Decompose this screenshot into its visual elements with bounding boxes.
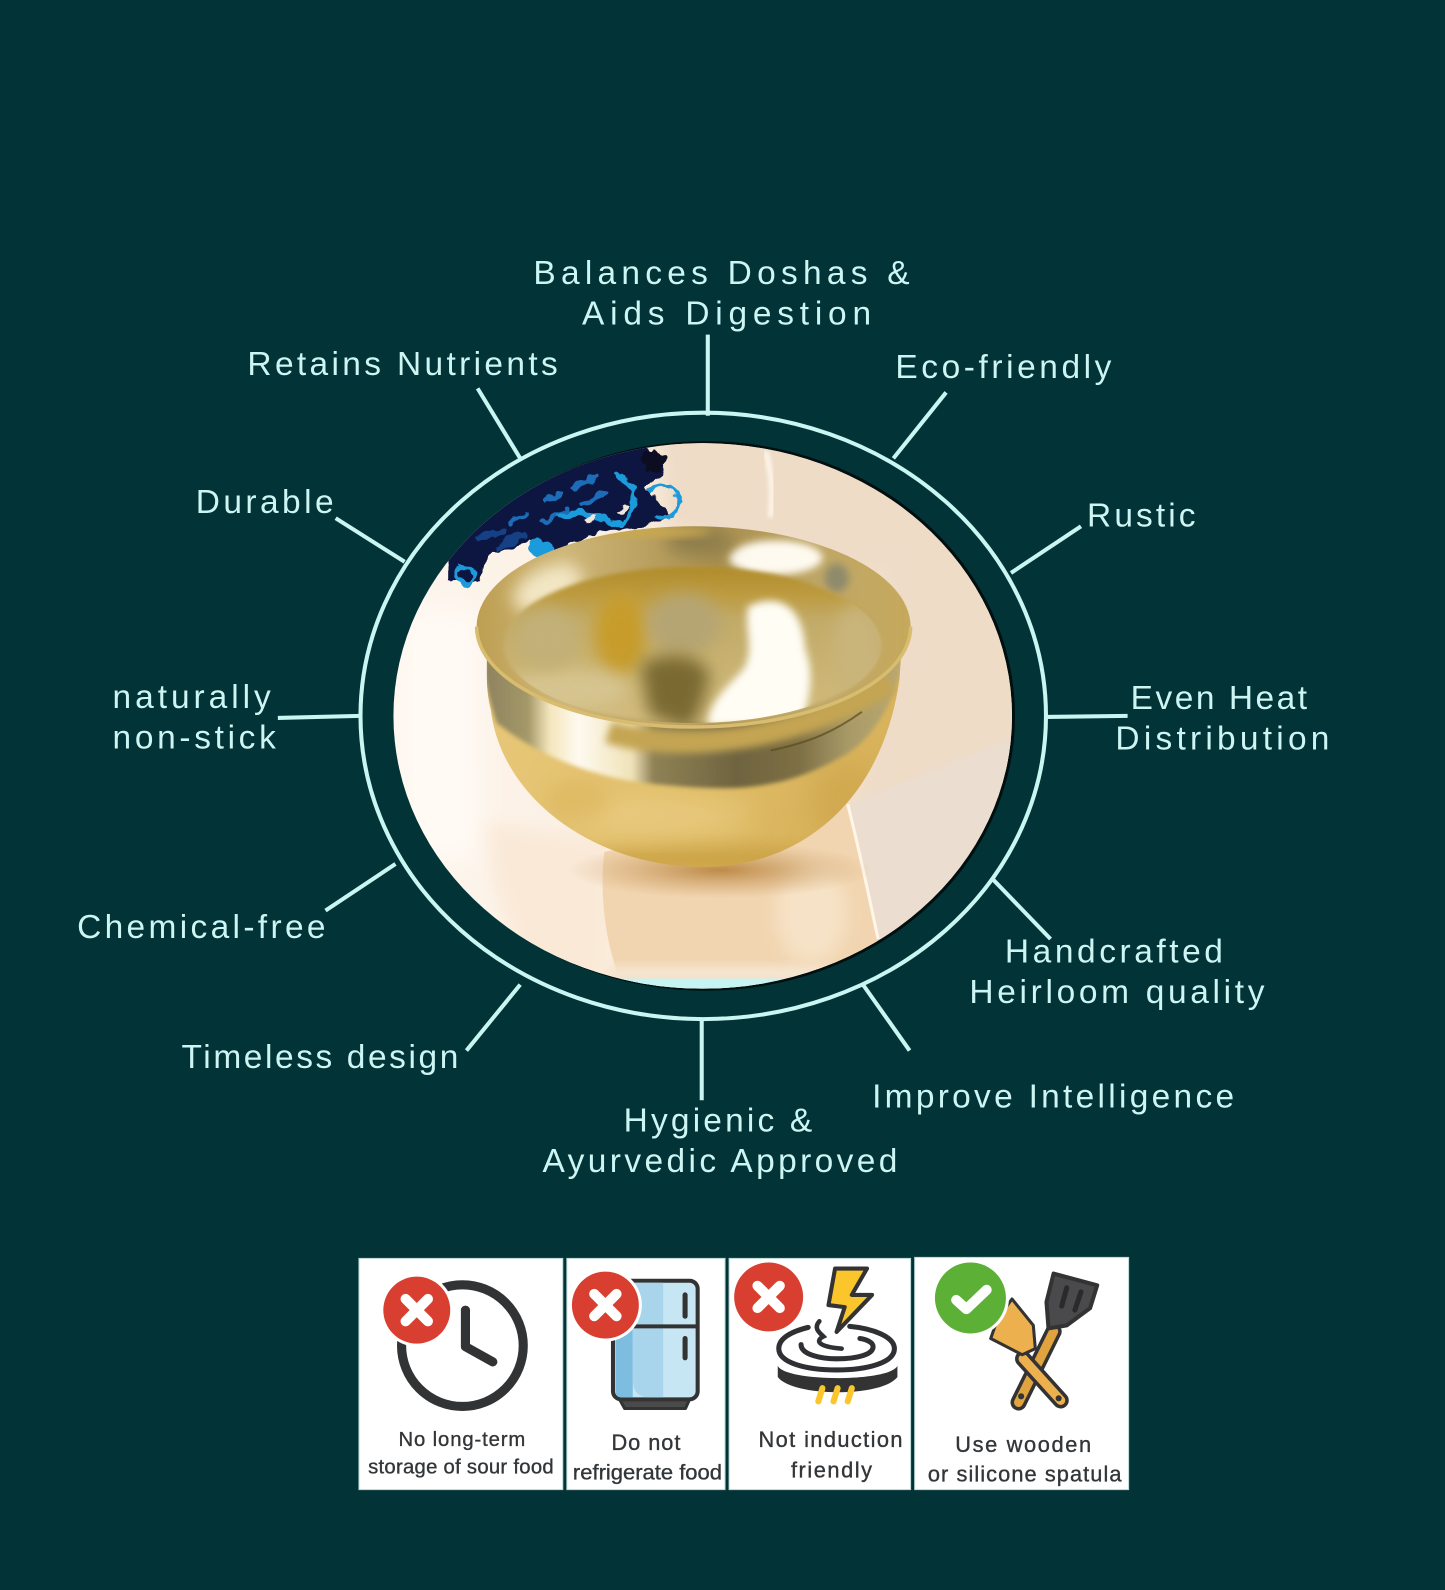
card: use wooden or silicone spatula: [915, 1257, 1129, 1490]
caption: No long-term: [399, 1429, 525, 1451]
icon: wooden fork spatula: [991, 1299, 1062, 1401]
caption: [928, 1432, 1122, 1486]
caption: friendly: [791, 1457, 872, 1482]
label: naturally non-stick: [113, 679, 276, 756]
label: Even Heat Distribution: Even Heat: [1131, 680, 1308, 717]
spoke lines: [278, 335, 1128, 1100]
icon: red cross badge: [734, 1262, 803, 1331]
label: Balances Doshas & Aids Digestion: Balances Doshas &: [533, 255, 910, 292]
icon: clock: [402, 1285, 523, 1406]
bowl rim: [477, 526, 911, 727]
card: no long-term storage of sour food: [359, 1258, 563, 1490]
label: Improve Intelligence: Improve Intelligence: [872, 1078, 1234, 1115]
label: Hygienic & Ayurvedic Approved: [543, 1103, 897, 1180]
photo shadow: [396, 441, 1015, 991]
icon: induction coil and lightning: [778, 1269, 897, 1401]
label: naturally non-stick: naturally: [113, 679, 271, 716]
cyan sliver at photo base: [620, 978, 786, 989]
icon: silicone spatula: [1019, 1274, 1097, 1402]
caption: Do not: [611, 1430, 680, 1455]
caption: [573, 1430, 722, 1484]
label: Handcrafted Heirloom quality: [969, 933, 1265, 1011]
label: Durable: Durable: [196, 484, 334, 521]
caption: refrigerate food: [573, 1460, 722, 1484]
caption: or silicone spatula: [928, 1461, 1122, 1486]
label: Eco-friendly: Eco-friendly: [895, 349, 1112, 386]
photo: bronze bowl on satin cloth: [385, 426, 1034, 1004]
icon: red cross badge: [569, 1269, 642, 1342]
blue yarn: [431, 436, 679, 583]
icon: red cross badge: [380, 1274, 453, 1347]
caption: Use wooden: [955, 1432, 1091, 1457]
label: Rustic: Rustic: [1087, 497, 1196, 534]
label: naturally non-stick: non-stick: [113, 719, 276, 756]
caption: [758, 1427, 902, 1482]
label: Hygienic & Ayurvedic Approved: Hygienic &: [624, 1103, 812, 1140]
label: Chemical-free: Chemical-free: [77, 909, 326, 946]
label: Handcrafted Heirloom quality: Heirloom quality: [969, 974, 1265, 1011]
cloth: folds: [401, 426, 1034, 1004]
label: Timeless design: Timeless design: [182, 1039, 458, 1076]
label: Handcrafted Heirloom quality: Handcrafted: [1005, 933, 1223, 970]
caption: storage of sour food: [368, 1456, 554, 1478]
cloth: bowl shadow: [579, 848, 862, 896]
bowl lip: [477, 627, 911, 727]
outer ring: [360, 413, 1046, 1019]
infographic canvas: [78, 260, 1328, 1490]
label: Even Heat Distribution: Distribution: [1115, 720, 1329, 757]
label: Retains Nutrients: Retains Nutrients: [247, 346, 558, 383]
icon: fridge: [612, 1281, 698, 1408]
label: Hygienic & Ayurvedic Approved: Ayurvedic Approved: [543, 1143, 897, 1180]
label: Balances Doshas & Aids Digestion: [533, 255, 910, 332]
card: not induction friendly: [729, 1258, 911, 1490]
bowl interior: [504, 567, 881, 723]
label: Even Heat Distribution: [1115, 680, 1329, 757]
card: do not refrigerate food: [567, 1258, 725, 1490]
caption: Not induction: [758, 1427, 902, 1452]
bowl body: [486, 660, 901, 867]
label: Balances Doshas & Aids Digestion: Aids Digestion: [582, 295, 871, 332]
icon: green check badge: [932, 1259, 1009, 1336]
caption: [368, 1429, 554, 1478]
